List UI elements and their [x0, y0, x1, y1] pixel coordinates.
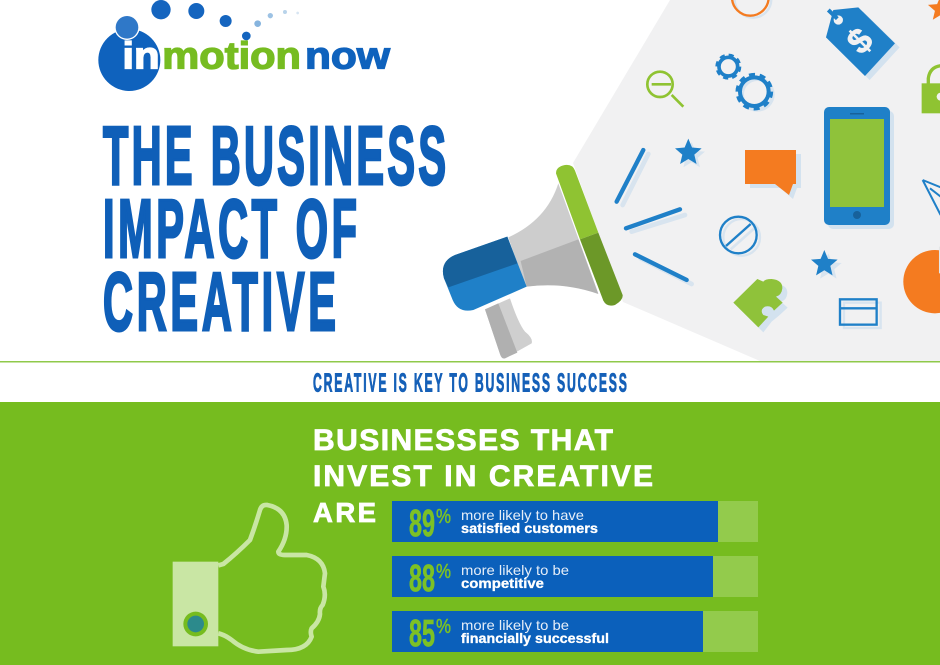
bar: 85%: 85	[409, 613, 435, 655]
bar: 85%	[392, 611, 758, 655]
bar: 88%: 88	[409, 558, 435, 600]
heading: businesses that invest in creative are: ARE	[313, 497, 376, 528]
logo: inmotionnow	[98, 0, 390, 91]
icon: gears	[717, 55, 773, 110]
icon: credit card	[840, 299, 881, 328]
logo: inmotionnow: in	[122, 34, 160, 77]
bar: 89%: more likely to have	[461, 507, 584, 523]
bar: 89%	[392, 501, 758, 545]
title: THE BUSINESS	[103, 109, 446, 202]
icon: pie chart	[903, 247, 940, 313]
logo: inmotionnow: now	[305, 34, 390, 77]
divider line	[0, 361, 940, 362]
title: CREATIVE	[103, 255, 336, 348]
icon: megaphone	[443, 150, 692, 358]
panel: green section	[0, 402, 940, 665]
hero light beam background	[573, 0, 940, 361]
logo: inmotionnow: motion	[162, 34, 301, 77]
icon: phone	[824, 107, 894, 229]
title	[103, 109, 446, 348]
heading: businesses that invest in creative are: INVEST IN CREATIVE	[313, 460, 653, 493]
icon: prohibition sign	[720, 217, 760, 256]
bar: 89%: %	[436, 506, 451, 528]
bar: 89%: 89	[409, 503, 435, 545]
heading: businesses that invest in creative are: BUSINESSES THAT	[313, 424, 613, 457]
bar: 85%: financially successful	[461, 631, 609, 646]
bar: 88%: more likely to be	[461, 562, 569, 578]
section heading: CREATIVE IS KEY TO BUSINESS SUCCESS	[313, 370, 627, 398]
bar: 88%: %	[436, 561, 451, 583]
icon: blue star	[675, 139, 705, 167]
bar: 88%: competitive	[461, 576, 545, 591]
bar: 85%: %	[436, 616, 451, 638]
icon: puzzle piece	[733, 279, 788, 332]
bar: 89%: satisfied customers	[461, 521, 598, 536]
icon: thumbs up	[173, 505, 325, 652]
icon group: floating marketing icons, upper	[647, 0, 940, 167]
title: IMPACT OF	[103, 182, 357, 275]
icon: magnifier	[647, 72, 683, 107]
bar: 88%	[392, 556, 758, 600]
icon: orange star	[928, 0, 940, 20]
icon: price tag	[826, 7, 900, 80]
icon: blue star	[811, 250, 842, 279]
icon: price tag: $	[839, 20, 881, 62]
icon: orange speech bubble	[745, 150, 801, 199]
icon group: floating marketing icons, lower	[720, 180, 940, 332]
bar: 85%: more likely to be	[461, 617, 569, 633]
icon: orange ring	[732, 0, 771, 18]
heading: businesses that invest in creative are	[313, 424, 653, 528]
icon: lock	[922, 66, 940, 113]
icon: paper plane	[923, 180, 940, 215]
